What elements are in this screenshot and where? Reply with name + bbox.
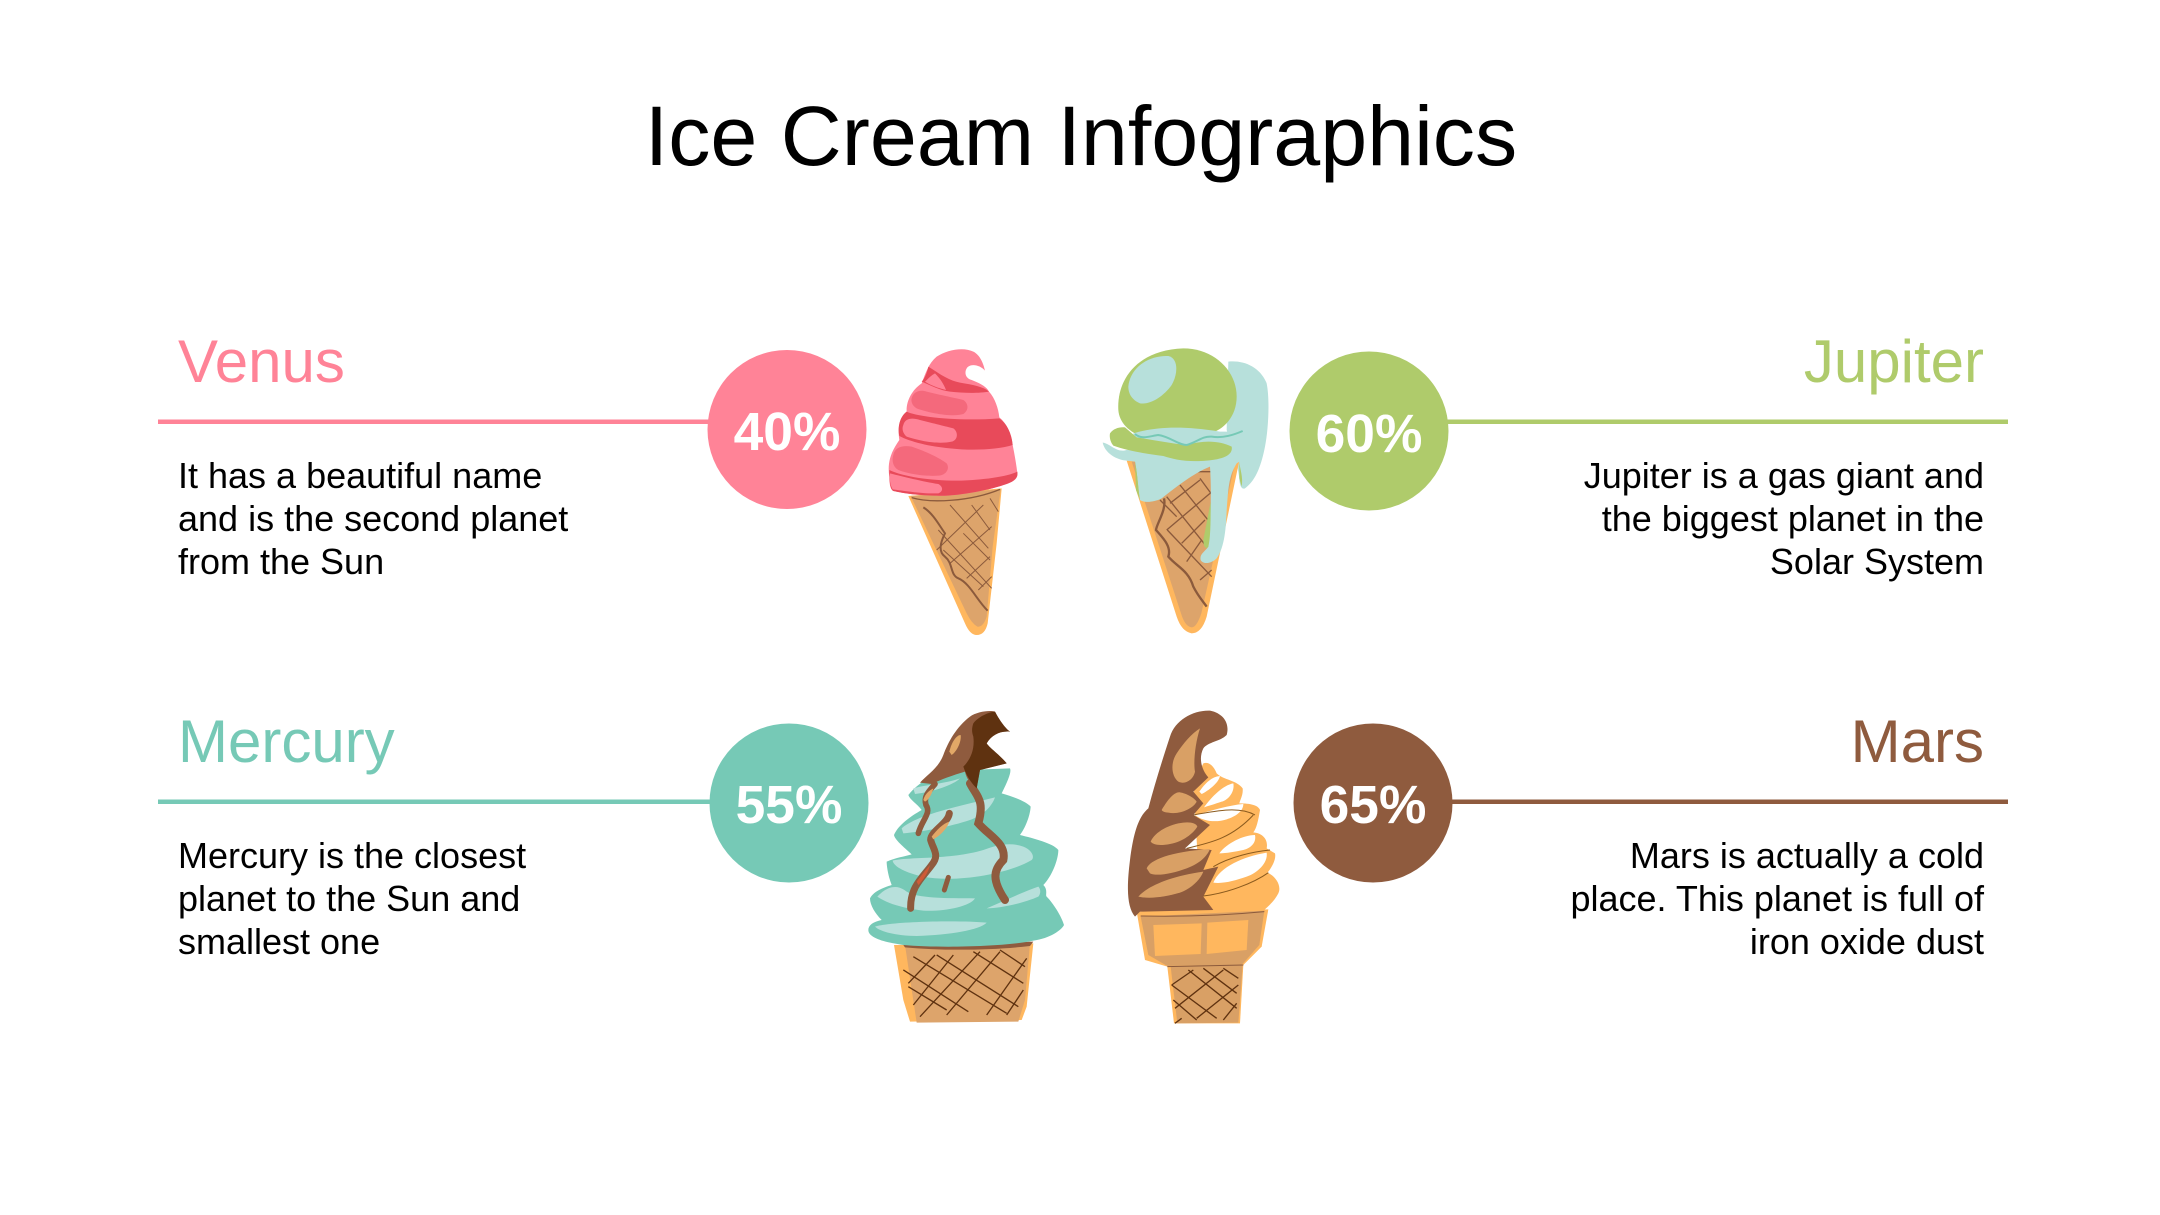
text block: Mercury: planet to the Sun and	[178, 878, 520, 919]
text block: Mars: Mars is actually a cold	[1630, 835, 1984, 876]
text block: Mercury: smallest one	[178, 921, 380, 962]
divider line: Mars	[1440, 800, 2008, 804]
text block: Mercury: Mercury is the closest	[178, 835, 526, 876]
text block: Jupiter: the biggest planet in the	[1602, 498, 1984, 539]
percentage badge: 60%: 60%	[1316, 405, 1422, 464]
icon: pink ice cream cone	[889, 349, 1017, 635]
panel: Mars	[1294, 708, 2008, 962]
text block: Venus: It has a beautiful name	[178, 455, 542, 496]
panel: Jupiter	[1290, 328, 2008, 582]
text block: Venus: from the Sun	[178, 541, 384, 582]
percentage badge: 40%	[708, 350, 866, 509]
heading: Mars: Mars	[1851, 708, 1984, 775]
divider line: Jupiter	[1440, 420, 2008, 424]
divider line: Venus	[158, 420, 718, 424]
text block: Jupiter: Jupiter is a gas giant and	[1584, 455, 1984, 496]
text block: Jupiter: Solar System	[1770, 541, 1984, 582]
panel: Mercury	[158, 708, 868, 962]
heading: Jupiter: Jupiter	[1804, 328, 1984, 395]
percentage badge: 55%: 55%	[736, 776, 842, 835]
percentage badge: 40%: 40%	[734, 403, 840, 462]
icon: green melting ice cream cone	[1103, 348, 1268, 633]
text block: Mars: iron oxide dust	[1750, 921, 1984, 962]
text block: Mars: place. This planet is full of	[1570, 878, 1985, 919]
percentage badge: 60%	[1290, 352, 1448, 510]
heading: Mercury: Mercury	[178, 708, 395, 775]
percentage badge: 65%: 65%	[1320, 776, 1426, 835]
title: Ice Cream Infographics	[645, 89, 1517, 183]
icon: chocolate and caramel soft serve	[1128, 711, 1279, 1023]
icon: mint ice cream with chocolate	[868, 711, 1064, 1023]
percentage badge: 55%	[710, 724, 868, 882]
panel: Venus	[158, 328, 866, 582]
text block: Venus: and is the second planet	[178, 498, 568, 539]
percentage badge: 65%	[1294, 724, 1452, 882]
heading: Venus: Venus	[178, 328, 345, 395]
divider line: Mercury	[158, 800, 718, 804]
